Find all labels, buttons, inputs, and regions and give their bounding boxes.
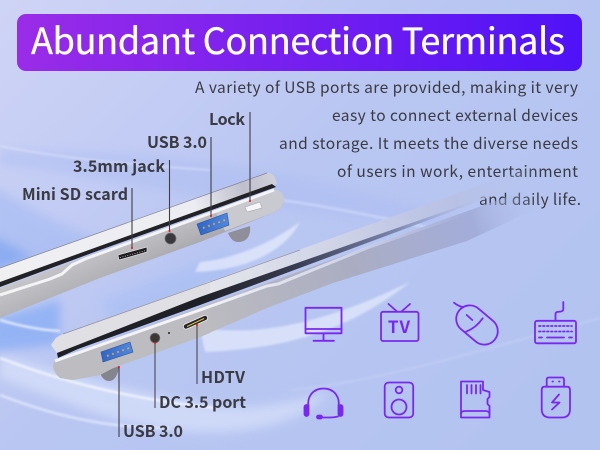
title bar [17, 13, 582, 71]
callout: 3.5mm jack [73, 153, 170, 232]
icon: monitor [306, 308, 342, 341]
USB port [101, 342, 133, 362]
icon: mouse [451, 300, 503, 350]
icon: memory card [461, 382, 490, 418]
hinge foot [100, 366, 119, 381]
callout: USB 3.0 (bottom) [118, 366, 183, 442]
callout: 3.5mm jack: 3.5mm jack [73, 153, 165, 177]
USB port [197, 213, 229, 235]
title: Abundant Connection Terminals [31, 13, 565, 65]
hinge foot [228, 226, 250, 242]
icon: headset [304, 388, 342, 418]
callout: HDTV: HDTV [201, 364, 245, 388]
lid [0, 173, 277, 284]
white strip [0, 190, 274, 295]
description text: A variety of USB ports are provided, making it very [195, 76, 578, 98]
laptop: upper (side view) [0, 173, 284, 318]
description text: and daily life. [479, 188, 581, 210]
icon: TV: TV [388, 313, 411, 338]
description text: and storage. It meets the diverse needs [279, 132, 578, 154]
laptop: lower (side view) [51, 164, 540, 381]
callout: USB 3.0 (bottom): USB 3.0 [123, 418, 183, 442]
description text: easy to connect external devices [332, 104, 578, 126]
description text: of users in work, entertainment [337, 160, 578, 182]
icon: TV [381, 304, 418, 341]
base [0, 189, 284, 318]
callout: USB 3.0 (top) [147, 129, 212, 217]
audio jack [165, 233, 176, 244]
callout: Mini SD scard: Mini SD scard [22, 181, 128, 205]
device icons [304, 300, 576, 418]
icon: keyboard [535, 302, 576, 343]
DC jack [150, 333, 160, 343]
lid [51, 164, 540, 353]
base [53, 185, 540, 380]
description text [195, 76, 581, 210]
callout: DC 3.5 port: DC 3.5 port [159, 389, 246, 413]
callout: DC 3.5 port [154, 342, 246, 413]
icon: speaker [385, 382, 413, 418]
callout: Lock [209, 106, 251, 202]
lock slot [245, 202, 262, 212]
callout: Mini SD scard [22, 181, 133, 249]
micro SD slot [118, 247, 147, 260]
HDMI port [186, 318, 205, 326]
white strip [55, 212, 470, 361]
callout: USB 3.0 (top): USB 3.0 [147, 129, 207, 153]
callout: Lock: Lock [209, 106, 245, 130]
black gap [0, 184, 276, 287]
black gap [57, 199, 480, 358]
icon: USB drive [542, 378, 570, 418]
callout: HDTV [196, 324, 245, 388]
